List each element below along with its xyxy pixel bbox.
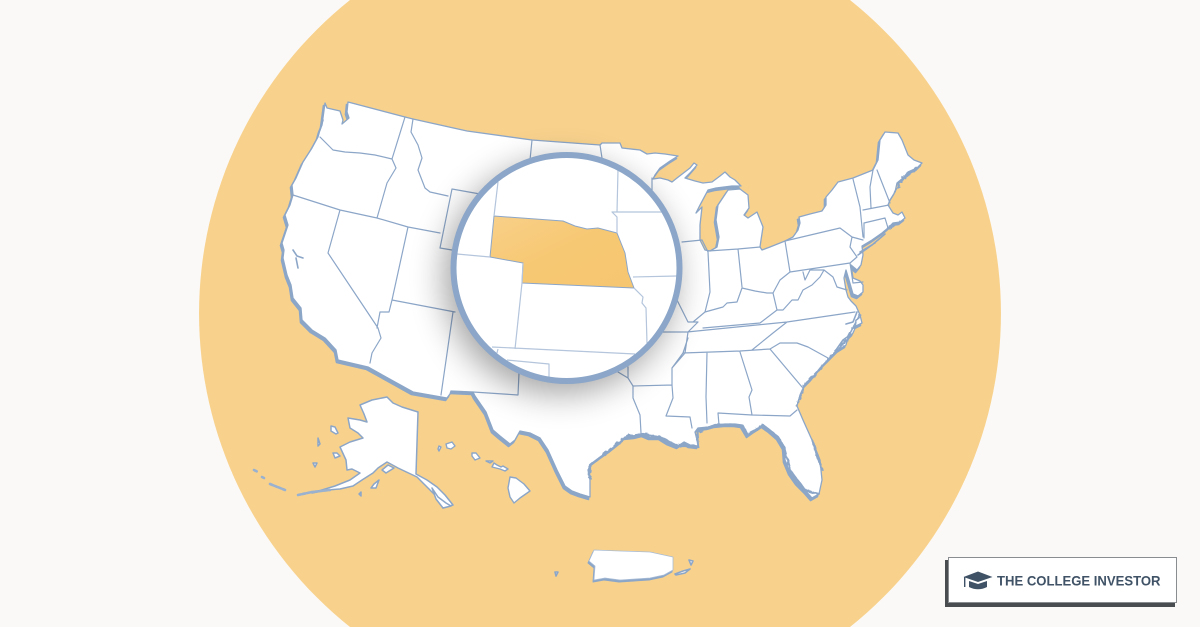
brand name: THE COLLEGE INVESTOR — [997, 573, 1160, 589]
Hawaii — [438, 442, 530, 503]
jagged gulf and atlantic coast — [590, 168, 917, 494]
icon: graduation cap — [964, 572, 992, 589]
Alaska mainland — [312, 397, 453, 508]
lens interior — [454, 155, 680, 381]
state borders — [293, 117, 890, 433]
Alaska — [254, 397, 453, 508]
logo badge: The College Investor — [945, 558, 1176, 607]
Hawaiian islands — [438, 442, 508, 471]
Puerto Rico main island — [589, 550, 673, 580]
coast detail: bays and sounds — [293, 120, 885, 350]
badge shadow — [945, 560, 1175, 607]
badge panel — [948, 558, 1176, 602]
magnified states — [457, 170, 677, 377]
magnifying glass over Nebraska — [444, 155, 680, 394]
map of the contiguous United States — [280, 102, 922, 500]
Puerto Rico — [555, 550, 693, 582]
smaller Puerto Rican islands — [555, 560, 693, 576]
magnified borders — [457, 170, 677, 377]
orange circle backdrop — [199, 0, 1001, 627]
Nebraska highlighted — [490, 216, 634, 288]
Aleutian islands and Alaskan isles — [254, 470, 330, 495]
Puerto Rico shadow — [588, 552, 672, 582]
states fill — [282, 102, 922, 498]
lens shadow — [444, 162, 676, 394]
lens ring — [454, 155, 680, 381]
outline shadow — [280, 104, 920, 500]
